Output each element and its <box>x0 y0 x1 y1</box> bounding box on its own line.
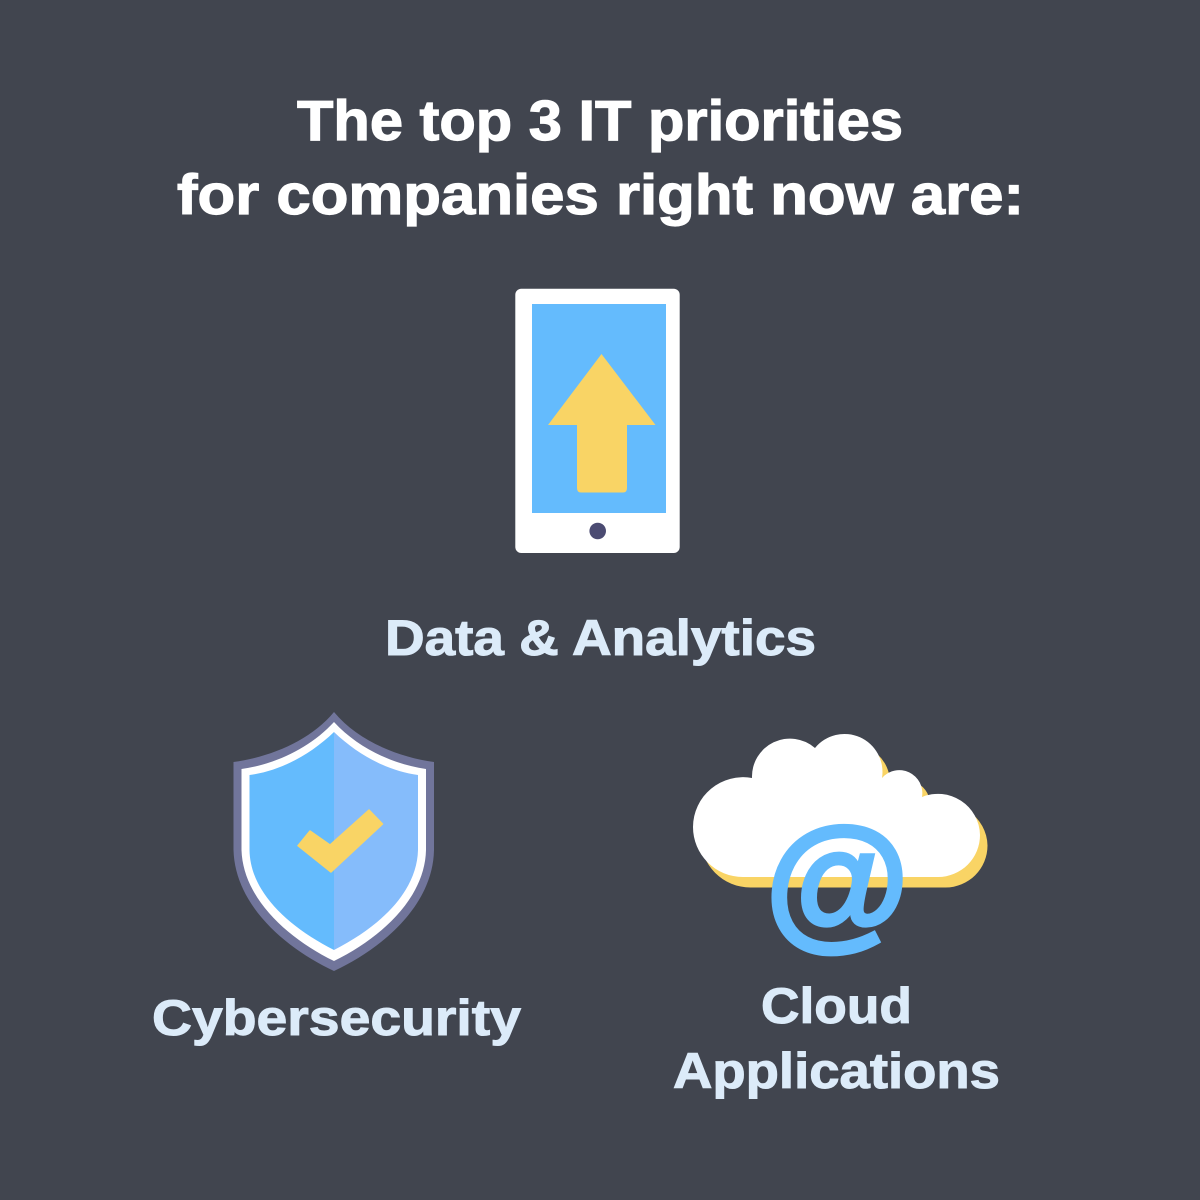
label: Cloud Applications: Cloud <box>761 978 912 1034</box>
title <box>177 89 1024 227</box>
icon: cloud with at sign <box>693 734 988 963</box>
icon: shield with check <box>234 712 434 971</box>
icon: cloud with at sign: @ <box>765 798 909 963</box>
label: Data & Analytics: Data & Analytics <box>385 610 816 666</box>
label: Cybersecurity: Cybersecurity <box>152 990 521 1046</box>
title: for companies right now are: <box>177 163 1024 227</box>
label: Cloud Applications: Applications <box>673 1043 1000 1099</box>
label: Cloud Applications <box>673 978 1000 1099</box>
title: The top 3 IT priorities <box>297 89 903 153</box>
icon: phone with up arrow <box>515 289 680 553</box>
